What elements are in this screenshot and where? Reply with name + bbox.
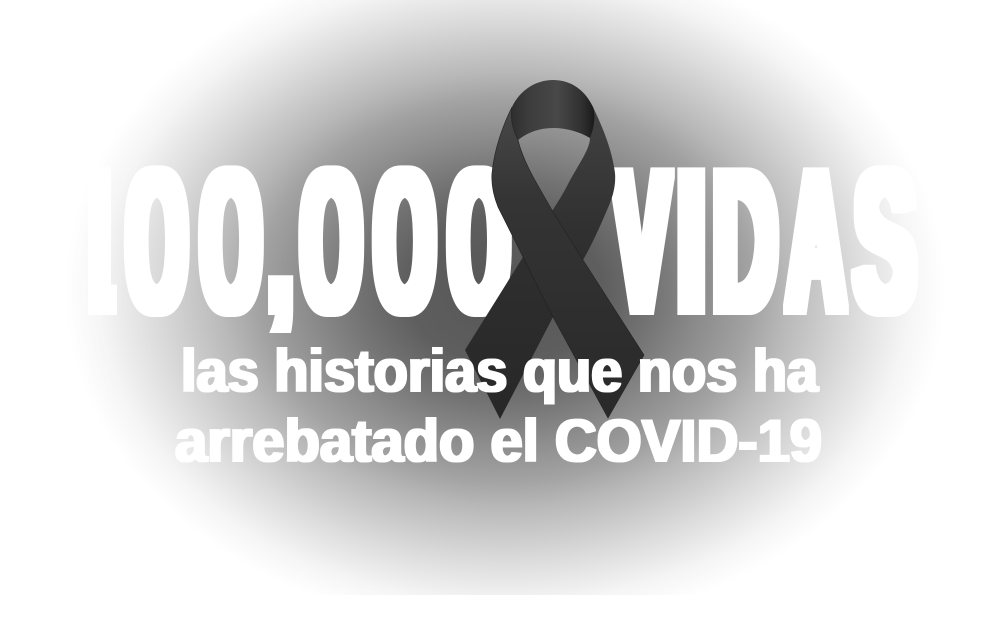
- heading number: digit one: 1: [57, 131, 132, 353]
- heading word: VIDAS: A: [787, 130, 845, 353]
- icon: black mourning ribbon: [465, 80, 644, 419]
- ribbon: top loop: [511, 80, 594, 140]
- heading: 100,000 VIDAS: [94, 165, 916, 333]
- heading word: VIDAS: [614, 129, 916, 354]
- subtitle line 2: arrebatado el COVID-19: [175, 408, 822, 474]
- subtitle line 1: las historias que nos ha: [181, 338, 819, 404]
- heading number: 00,000: 00,000: [123, 130, 513, 353]
- ribbon: front strand and right tail: [492, 107, 644, 418]
- heading word: VIDAS: V: [614, 130, 669, 353]
- ribbon: back strand and left tail: [465, 107, 615, 419]
- subtitle: [175, 338, 822, 474]
- heading word: VIDAS: D: [713, 129, 777, 353]
- heading word: VIDAS: I: [676, 130, 707, 353]
- heading word: VIDAS: S: [854, 130, 916, 354]
